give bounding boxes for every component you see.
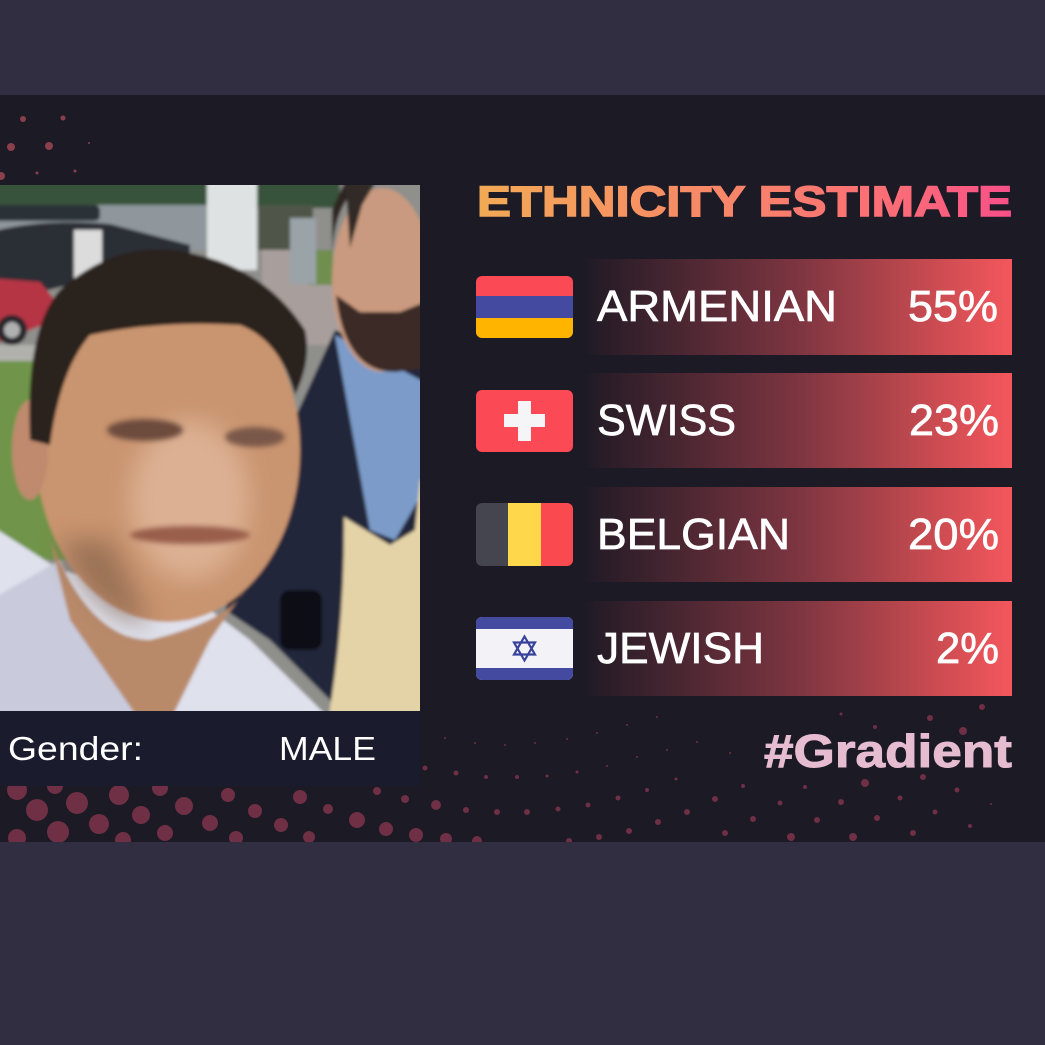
gender value: MALE [279,730,376,767]
label: ARMENIAN [597,282,837,331]
icon: Swiss flag [476,390,573,452]
row: Armenian 55% [476,259,1012,355]
label: BELGIAN [597,510,790,559]
icon: Belgian flag [476,503,573,566]
row: Jewish 2% [476,601,1012,696]
hashtag: #Gradient [764,725,1012,777]
icon: Armenian flag [476,276,573,338]
bar [580,373,1012,468]
photo backdrop [0,175,430,721]
second man [224,185,420,702]
value: 2% [936,624,999,673]
label: JEWISH [597,624,764,673]
row: Belgian 20% [476,487,1012,582]
value: 23% [909,396,999,445]
row: Swiss 23% [476,373,1012,468]
value: 55% [908,282,998,331]
gender panel background [0,711,420,786]
foreground man [0,250,332,721]
dark central band [0,95,1045,842]
value: 20% [908,510,999,559]
icon: Israeli flag [476,617,573,680]
wrapped flatbread and watch [279,478,420,711]
dot pattern: bottom [7,704,992,848]
dot pattern: top left [0,116,90,180]
bar [580,259,1012,355]
bar [580,487,1012,582]
gender label: Gender: [8,730,143,767]
label: SWISS [597,396,736,445]
photo: selfie of two men outdoors, abstracted [0,175,432,721]
title: ETHNICITY ESTIMATE [477,178,1012,226]
parked cars [0,175,316,346]
infographic canvas [0,95,1045,842]
bar [580,601,1012,696]
